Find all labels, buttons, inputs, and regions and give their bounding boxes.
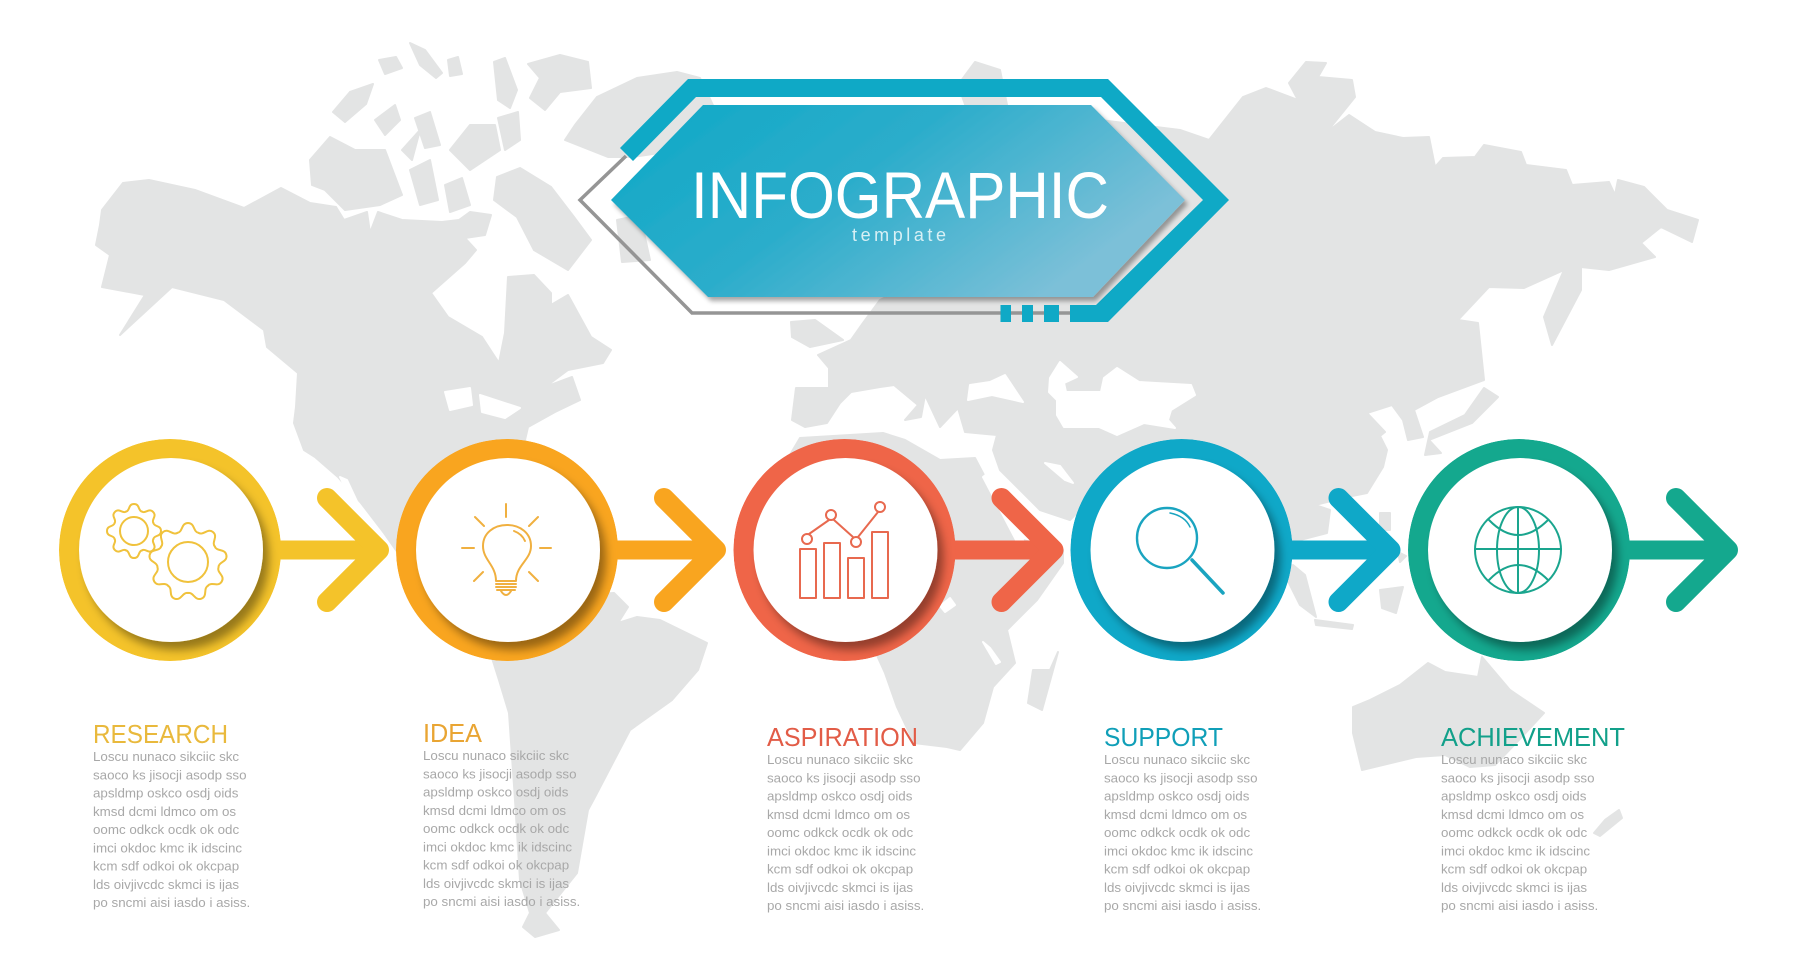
ring bbox=[396, 439, 618, 661]
map: Iceland and British Isles bbox=[617, 215, 843, 347]
step 1: research bbox=[59, 439, 379, 910]
body text: kcm sdf odkoi ok okcpap bbox=[1441, 862, 1587, 876]
body text: imci okdoc kmc ik idscinc bbox=[1104, 843, 1253, 858]
arrow bbox=[1609, 498, 1728, 602]
body text: Loscu nunaco sikciic skc bbox=[1441, 752, 1587, 767]
banner hexagon bbox=[611, 105, 1185, 297]
step 5: achievement bbox=[1408, 439, 1728, 913]
body text: saoco ks jisocji asodp sso bbox=[767, 770, 921, 785]
step 4: support bbox=[1070, 439, 1390, 913]
title banner bbox=[580, 79, 1229, 322]
map: white seas bbox=[340, 362, 1195, 664]
body text: imci okdoc kmc ik idscinc bbox=[93, 840, 242, 855]
body text: Loscu nunaco sikciic skc bbox=[767, 752, 913, 767]
body text: apsldmp oskco osdj oids bbox=[1441, 788, 1587, 804]
body text: oomc odkck ocdk ok odc bbox=[767, 825, 913, 840]
heading: SUPPORT bbox=[1104, 722, 1223, 752]
body text: Loscu nunaco sikciic skc bbox=[1104, 752, 1250, 767]
body text: imci okdoc kmc ik idscinc bbox=[423, 839, 572, 854]
body text: po sncmi aisi iasdo i asiss. bbox=[423, 894, 580, 909]
icon: gears bbox=[107, 504, 228, 602]
body text: kmsd dcmi ldmco om os bbox=[423, 803, 566, 818]
icon: globe bbox=[1475, 507, 1561, 593]
body text: lds oivjivcdc skmci is ijas bbox=[767, 880, 913, 895]
ring bbox=[1408, 439, 1630, 661]
body text: kmsd dcmi ldmco om os bbox=[93, 804, 236, 819]
body text: apsldmp oskco osdj oids bbox=[93, 786, 239, 800]
map: New Zealand bbox=[1594, 810, 1622, 836]
icon: light bulb bbox=[462, 504, 551, 595]
body text: apsldmp oskco osdj oids bbox=[767, 788, 913, 804]
body text: apsldmp oskco osdj oids bbox=[1104, 788, 1250, 804]
map: Australia bbox=[1353, 657, 1544, 770]
body text: Loscu nunaco sikciic skc bbox=[93, 749, 239, 764]
banner teal frame bbox=[620, 79, 1229, 322]
body text: kmsd dcmi ldmco om os bbox=[1441, 807, 1584, 822]
body text: kcm sdf odkoi ok okcpap bbox=[1104, 862, 1250, 876]
body text: oomc odkck ocdk ok odc bbox=[1104, 825, 1250, 840]
map: North America bbox=[96, 180, 611, 570]
banner tick marks bbox=[1000, 305, 1059, 322]
map: Japan bbox=[1425, 388, 1498, 455]
body text: kcm sdf odkoi ok okcpap bbox=[93, 858, 239, 874]
body text: lds oivjivcdc skmci is ijas bbox=[93, 877, 239, 892]
body text: apsldmp oskco osdj oids bbox=[423, 784, 569, 800]
map: Eurasia bbox=[792, 62, 1698, 540]
body text: saoco ks jisocji asodp sso bbox=[423, 766, 577, 781]
map: Greenland bbox=[565, 72, 720, 157]
body text: lds oivjivcdc skmci is ijas bbox=[1104, 880, 1250, 895]
arrow bbox=[1272, 498, 1390, 602]
step 3: aspiration bbox=[734, 439, 1054, 913]
title text: INFOGRAPHIC bbox=[691, 158, 1109, 232]
banner grey outline bbox=[580, 156, 1070, 313]
body text: po sncmi aisi iasdo i asiss. bbox=[1441, 898, 1598, 913]
icon: bar chart bbox=[800, 502, 888, 598]
arrow bbox=[934, 498, 1054, 602]
body text: imci okdoc kmc ik idscinc bbox=[767, 843, 916, 858]
body text: oomc odkck ocdk ok odc bbox=[1441, 825, 1587, 840]
body text: oomc odkck ocdk ok odc bbox=[423, 821, 569, 836]
map: Africa bbox=[770, 433, 1063, 750]
body text: Loscu nunaco sikciic skc bbox=[423, 748, 569, 763]
ring bbox=[1070, 439, 1292, 661]
body text: saoco ks jisocji asodp sso bbox=[93, 767, 247, 782]
map: Southeast Asian islands bbox=[1285, 513, 1406, 629]
body text: imci okdoc kmc ik idscinc bbox=[1441, 843, 1590, 858]
subtitle text: template bbox=[852, 225, 946, 245]
body text: kcm sdf odkoi ok okcpap bbox=[423, 858, 569, 872]
map: Madagascar bbox=[1028, 652, 1058, 710]
body text: saoco ks jisocji asodp sso bbox=[1441, 770, 1595, 785]
arrow bbox=[597, 498, 716, 602]
icon: magnifier bbox=[1137, 508, 1223, 593]
body text: saoco ks jisocji asodp sso bbox=[1104, 770, 1258, 785]
body text: kcm sdf odkoi ok okcpap bbox=[767, 862, 913, 876]
step 2: idea bbox=[396, 439, 716, 909]
heading: ASPIRATION bbox=[767, 722, 918, 752]
arrow bbox=[260, 498, 379, 602]
body text: kmsd dcmi ldmco om os bbox=[1104, 807, 1247, 822]
body text: po sncmi aisi iasdo i asiss. bbox=[93, 895, 250, 910]
map: South America bbox=[480, 593, 707, 937]
heading: RESEARCH bbox=[93, 719, 228, 749]
body text: po sncmi aisi iasdo i asiss. bbox=[767, 898, 924, 913]
body text: kmsd dcmi ldmco om os bbox=[767, 807, 910, 822]
heading: ACHIEVEMENT bbox=[1441, 722, 1625, 752]
body text: po sncmi aisi iasdo i asiss. bbox=[1104, 898, 1261, 913]
ring bbox=[734, 439, 956, 661]
body text: lds oivjivcdc skmci is ijas bbox=[423, 876, 569, 891]
heading: IDEA bbox=[423, 718, 483, 748]
ring bbox=[59, 439, 281, 661]
body text: lds oivjivcdc skmci is ijas bbox=[1441, 880, 1587, 895]
body text: oomc odkck ocdk ok odc bbox=[93, 822, 239, 837]
map: Arctic islands bbox=[310, 43, 591, 270]
